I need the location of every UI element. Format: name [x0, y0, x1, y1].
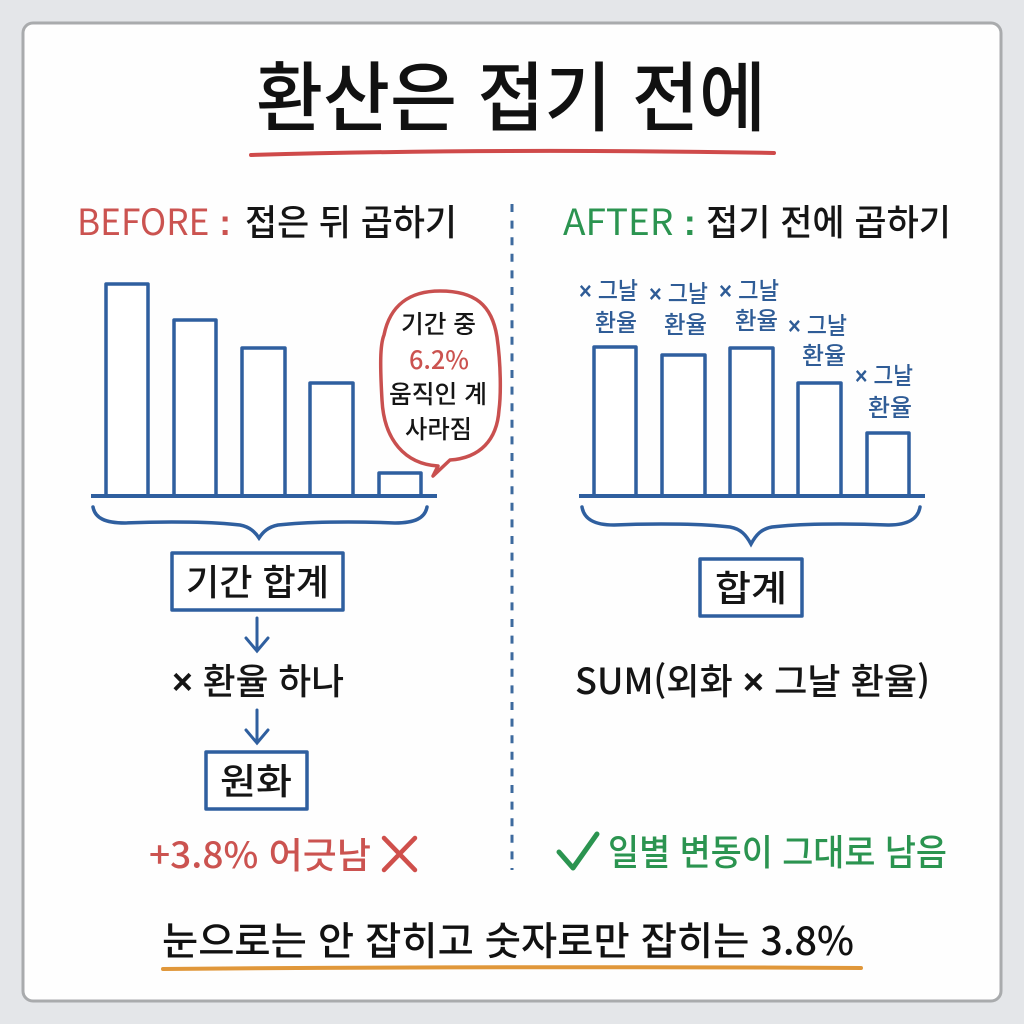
callout: lost movement: 사라짐 [405, 410, 472, 446]
bar labels: after: × 그날 [788, 306, 847, 341]
footer underline [163, 967, 861, 969]
result: after: 일별 변동이 그대로 남음 [608, 824, 947, 876]
footer takeaway: 눈으로는 안 잡히고 숫자로만 잡히는 3.8% [162, 911, 854, 967]
brace: before [93, 507, 427, 538]
text: formula: SUM(외화 × 그날 환율) [575, 653, 930, 705]
brace: after [582, 507, 920, 544]
callout: lost movement [381, 291, 500, 476]
bar labels: after: 환율 [595, 303, 637, 338]
text: times one rate: × 환율 하나 [172, 653, 344, 705]
box: won: 원화 [220, 753, 292, 805]
center dashed divider [510, 204, 514, 870]
bar labels: after [579, 271, 913, 423]
bar labels: after: 환율 [664, 305, 707, 340]
box: total: 합계 [715, 560, 787, 612]
callout: lost movement: 기간 중 [401, 305, 476, 341]
arrow: down 1 [246, 618, 268, 651]
title underline [251, 151, 774, 155]
bar chart: after [579, 347, 925, 496]
bar labels: after: × 그날 [649, 274, 708, 309]
arrow: down 2 [246, 710, 268, 743]
bar labels: after: × 그날 [855, 356, 913, 391]
box: period total: 기간 합계 [186, 554, 329, 606]
bar labels: after: × 그날 [719, 271, 779, 306]
bar labels: after: 환율 [802, 336, 846, 371]
heading: before [77, 194, 457, 246]
heading: after: 접기 전에 곱하기 [706, 194, 951, 246]
heading: after [563, 194, 951, 246]
bar labels: after: 환율 [735, 301, 778, 336]
title: 환산은 접기 전에 [256, 37, 766, 147]
bar labels: after: 환율 [868, 388, 912, 423]
box: won [206, 752, 307, 809]
callout: lost movement: 6.2% [409, 341, 469, 377]
heading: after: AFTER : [563, 194, 696, 246]
callout: lost movement: 움직인 계 [389, 375, 487, 411]
heading: before: BEFORE : [77, 194, 231, 246]
result: before: +3.8% 어긋남 [149, 827, 371, 879]
box: total [700, 559, 802, 616]
heading: before: 접은 뒤 곱하기 [245, 194, 457, 246]
bar labels: after: × 그날 [579, 271, 638, 306]
bar chart: before [91, 284, 437, 496]
